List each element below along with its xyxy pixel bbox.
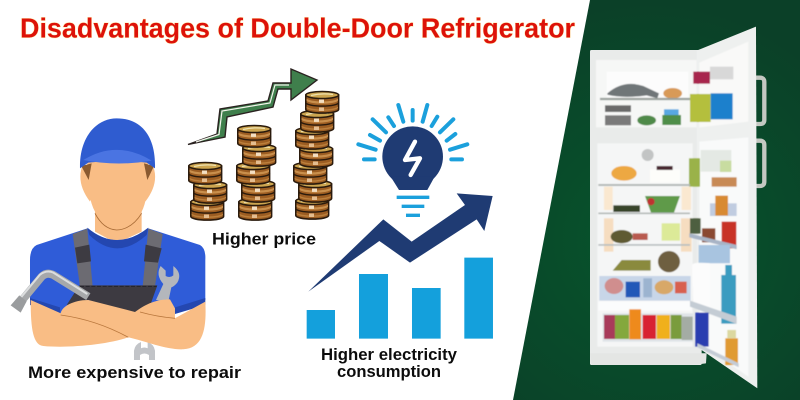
freezer compartment (596, 60, 697, 127)
upper shelf food (611, 166, 637, 181)
fruit drawer (603, 313, 693, 342)
crossed arms (31, 299, 206, 349)
label: higher electricity consumption (321, 346, 458, 381)
door inner panels (699, 42, 748, 127)
label: more expensive to repair: More expensive to repair (28, 363, 241, 382)
collar (87, 228, 148, 248)
handles (752, 78, 764, 186)
drawer (599, 276, 691, 301)
bulb base lines (397, 197, 429, 215)
overall straps (73, 229, 163, 287)
lights (604, 218, 613, 252)
label: higher price: Higher price (212, 230, 316, 248)
refrigerator (590, 27, 764, 388)
L-shaped wrench (21, 274, 88, 302)
lightning bolt (405, 142, 420, 175)
icon: repair worker (11, 118, 206, 360)
title: Disadvantages of Double-Door Refrigerator (20, 12, 575, 44)
bars (307, 258, 493, 339)
shirt (30, 228, 205, 327)
door shelves (701, 150, 731, 172)
sleeve cuffs (30, 298, 205, 314)
rays (358, 105, 467, 159)
green background panel (513, 0, 800, 400)
lower compartment (597, 143, 693, 347)
coin stack: medium (237, 126, 276, 220)
hair (81, 163, 154, 180)
rising arrow (308, 193, 493, 292)
bulb (382, 126, 443, 190)
door (697, 27, 757, 388)
open wrench (156, 266, 179, 302)
icon: light bulb with rays (358, 105, 467, 215)
coin stack: tall (294, 92, 339, 219)
label: higher electricity consumption: consumption (337, 363, 441, 381)
middle shelves food (611, 230, 633, 243)
face (87, 162, 148, 230)
vent (642, 149, 654, 161)
freezer contents (607, 84, 659, 98)
ears (80, 163, 155, 202)
neck (95, 207, 142, 243)
overall bib (67, 285, 157, 313)
label: higher electricity consumption: Higher electricity (321, 346, 458, 364)
fridge body (590, 50, 702, 365)
coin stack: short (189, 162, 227, 220)
cap (80, 118, 155, 168)
icon: rising green arrow (188, 69, 317, 144)
bar chart with rising arrow (307, 193, 493, 339)
lower wrench (134, 342, 155, 360)
cap visor (83, 150, 152, 164)
